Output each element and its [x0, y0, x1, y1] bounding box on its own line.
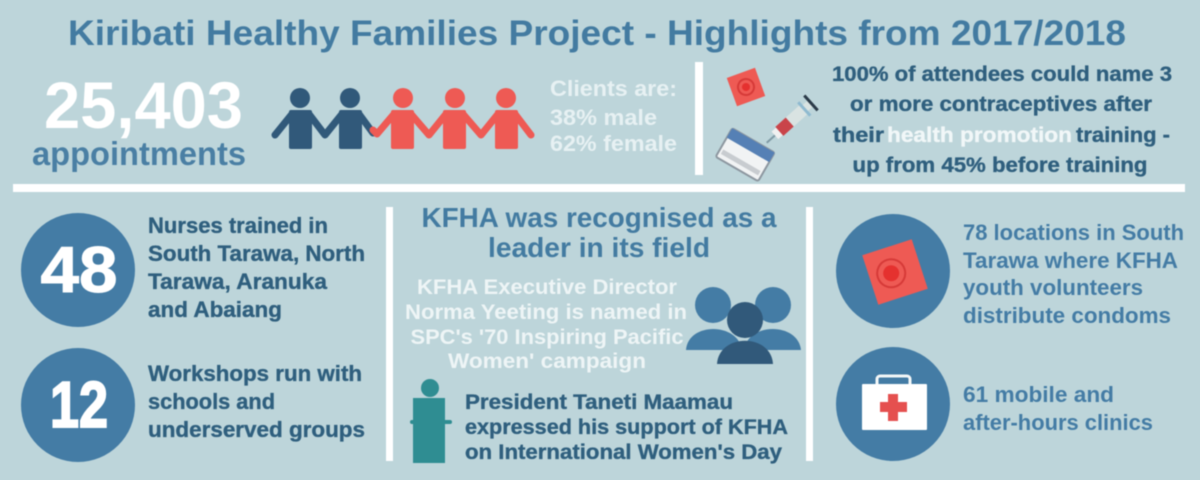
client gender split [550, 76, 677, 156]
stat: 12 workshops [21, 348, 365, 462]
client gender split: Clients are: [550, 76, 677, 101]
President text: President Taneti Maamau [465, 391, 733, 414]
stat: mobile clinics: after-hours clinics [963, 410, 1153, 435]
Norma Yeeting text [405, 276, 687, 373]
stat: 48 nurses trained: South Tarawa, North [148, 241, 365, 266]
stat: condom distribution: distribute condoms [963, 303, 1171, 328]
stat: mobile clinics: 61 mobile and [963, 382, 1114, 407]
panel: appointments [32, 68, 246, 172]
President text: on International Women's Day [465, 441, 782, 464]
heading: KFHA recognised: KFHA was recognised as a [422, 202, 777, 233]
President text: expressed his support of KFHA [465, 416, 788, 439]
pill pack [716, 128, 775, 181]
stat: condom distribution: Tarawa where KFHA [963, 248, 1178, 273]
stat: 48 nurses trained: and Abaiang [148, 297, 282, 322]
icon: first aid kit [862, 376, 927, 430]
stat: 48 nurses trained: 48 [40, 233, 118, 306]
stat: condom distribution: youth volunteers [963, 275, 1143, 300]
heading: KFHA recognised [422, 202, 777, 263]
Norma Yeeting text: Women' campaign [448, 350, 646, 373]
icon: five people holding hands [275, 88, 531, 149]
contraceptive knowledge text: up from 45% before training [852, 154, 1148, 177]
contraceptive knowledge text: 100% of attendees could name 3 [832, 63, 1172, 86]
President text [465, 391, 788, 464]
stat: 12 workshops: 12 [50, 368, 108, 441]
client gender split: 62% female [550, 131, 677, 156]
syringe [760, 95, 819, 150]
stat: 48 nurses trained: Nurses trained in [148, 213, 328, 238]
icon: president at podium [410, 379, 452, 463]
contraceptive knowledge text [832, 63, 1172, 177]
stat: 48 nurses trained [21, 213, 365, 327]
client gender split: 38% male [550, 105, 657, 130]
stat: condom distribution [836, 214, 1184, 328]
Norma Yeeting text: Norma Yeeting is named in [405, 301, 687, 324]
heading: KFHA recognised: leader in its field [488, 232, 710, 263]
stat: condom distribution: 78 locations in South [963, 220, 1184, 245]
Norma Yeeting text: SPC's '70 Inspiring Pacific [410, 326, 684, 349]
stat: 12 workshops: underserved groups [148, 417, 365, 442]
contraceptive knowledge text: health promotion [887, 124, 1072, 147]
title: Kiribati Healthy Families Project - Highlights from 2017/2018 [68, 14, 1126, 53]
condom packet [727, 68, 765, 106]
Norma Yeeting text: KFHA Executive Director [417, 276, 677, 299]
stat: 12 workshops: schools and [148, 389, 275, 414]
stat: 12 workshops: Workshops run with [148, 361, 362, 386]
icon: group of people [686, 287, 801, 364]
icon: contraceptives [716, 68, 819, 181]
appointments number: 25,403 [44, 68, 243, 142]
stat: 48 nurses trained: Tarawa, Aranuka [148, 269, 328, 294]
stat: mobile clinics [836, 347, 1153, 461]
contraceptive knowledge text: their [833, 124, 884, 147]
contraceptive knowledge text: training - [1076, 124, 1170, 147]
appointments label: appointments [32, 135, 246, 172]
contraceptive knowledge text: or more contraceptives after [850, 93, 1152, 116]
